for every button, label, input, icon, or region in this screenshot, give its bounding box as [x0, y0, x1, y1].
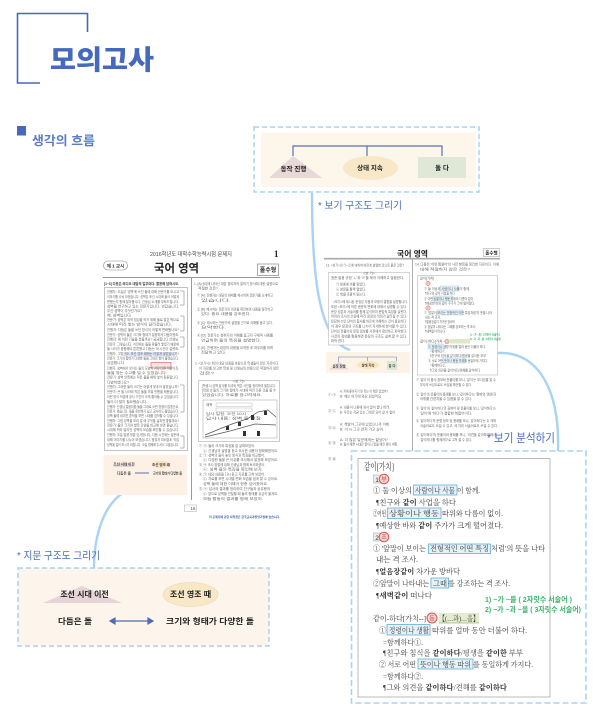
page 1 passage box: 돌을 깎는 수고를 덜 수 있었습니다. [107, 370, 167, 375]
page 2 left column passage: 13. <보기>의 ㉠~㉢에 대하여 바르게 설명한 것으로 옳은 것은? [326, 262, 404, 268]
page 1 passage box: 진행자: 그렇군요. 조선 영조 때에는 어떻게 쌓았습니까? [107, 351, 179, 356]
page 1 questions: 있었습니다. 자료를 참고하세요. [202, 392, 262, 397]
page 2 right column question: ¶친구와 침식을 같이하다/평생을 같이한 부부 [430, 353, 487, 358]
handwritten note: view structure: * 보기 구조도 그리기 [318, 200, 402, 212]
page 1 passage box: 이야기를 나눠 보겠습니다. 성벽은 조선 시대에 들어 어떻게 [107, 294, 179, 299]
page 2 left column passage: ㉠ 밤중에 비를 맞았다. [336, 282, 366, 286]
page 2 right column question: ② 앞말이 나타내는 그때를 강조하는 격 조사. [424, 324, 476, 329]
page 1 passage box: 시대에 따라 쌓는 방식이 달라졌습니다. [107, 322, 172, 326]
page 1 summary diagram: 조선 시대 이전 [113, 462, 135, 466]
page 2 left column choices [328, 388, 398, 461]
page 2 right column question: =함께하다②. [430, 362, 446, 368]
page 1 passage box [104, 288, 188, 450]
meaning group 2: ②앞말이 나타내는 [373, 578, 430, 588]
page 2 left column passage: 문장 성분과 서술어를 함께 분석하여 문법적 특징을 살핀다. [331, 309, 407, 314]
page 1 questions: 답사 일정: 오전 10시 [206, 411, 246, 416]
page 2 right column question: ④ '같이하다'의 문형 정보 및 용례를 보니, '같이하다'는 두 개에 [416, 418, 496, 423]
highlight boxes [387, 485, 490, 669]
page 1 questions: 전달하고 있다. [201, 350, 226, 354]
triangle node [269, 156, 322, 178]
red highlight box [151, 362, 171, 368]
page 1 questions: ③ ㉠: 조사 방법에 대해 선생님과 함께 토의하였어. [199, 462, 265, 467]
page 2 right column question: ¶예상한 바와 같이 주가가 크게 떨어졌다. [425, 300, 475, 306]
meaning 2 of 같이하다: =함께하다②. [383, 671, 423, 681]
page 2 right column question: ③ '같이'와 '같이하다'의 표제어 및 뜻풀이를 보니, '같이하다'는 [416, 406, 497, 410]
meaning 2 of 같이하다: 를 동일하게 가지다. [473, 659, 533, 669]
page 2 left column choices: A: 더 많은 일꾼에게는 끝났어? [340, 437, 388, 442]
page 2 right column question: 서술어로도 쓰일 수 있고, 세 자리 서술어로도 쓰일 수 있다. [420, 423, 498, 428]
page 2 right column question: ¶그와 의견을 같이하다/견해를 같이하다 [430, 368, 481, 372]
page 1 passage box: 진행자: 그럼 성벽을 보러 갈 때 무엇을 살피면 좋을까요? [107, 418, 179, 423]
page 2 left column passage: 단어의 뜻풀이와 문형 정보를 사전에서 확인하고 파악한다. [331, 328, 407, 334]
page 2 left column passage: <보 기> [363, 270, 375, 276]
title: 모의고사 [50, 38, 154, 78]
triangle node [43, 586, 122, 603]
page 2 left column passage: 문장에 쓰인 단어의 품사를 바르게 이해하는 것이 중요하다. [331, 318, 407, 324]
meaning group 1: ¶예상한 바와 같이 주가가 크게 떨어졌다. [376, 520, 503, 530]
page 2 left column passage: 사전의 정보를 활용하면 문장의 구조도 쉽게 알 수 있다. [331, 334, 407, 338]
section marker [17, 126, 26, 136]
title bracket [18, 14, 88, 83]
meaning group 2: 전형적인 어떤 특징 [430, 543, 489, 553]
left label: 다듬은 돌 [58, 616, 93, 626]
page 2 left column choices: ④ ㉣ [328, 440, 336, 445]
meaning group 1: ¶친구와 같이 사업을 하다 [376, 497, 457, 507]
meaning group 1: ②어떤 [373, 508, 386, 518]
page 1 questions: ④ [D]: 전문가는 청취자의 이해를 돕고자 구체적 사례를 [197, 332, 274, 338]
meaning group 2: ¶얼음장같이 차가운 방바닥 [376, 566, 461, 576]
page 1 passage box: 돌이 더 많이 필요했습니다. [107, 399, 147, 404]
meaning 1 of 같이하다: =함께하다①. [383, 637, 423, 647]
page 2 left column choices: B: 제는 여기에 와요 읽었어요. [340, 394, 382, 398]
ellipse node [343, 156, 398, 180]
page 2 right column question: 어휘를 관련지을 수 있음을 알 수 있다. [420, 396, 472, 401]
heading: 같이: 같이[가치] [364, 461, 394, 473]
page 2 right column question: ⑤ '같이하다'의 뜻풀이와 용례를 보니, '의견을 같이하다'에서 [416, 432, 496, 437]
page 2 right column question: '같이하다'를 '함께하다'로 고쳐 쓸 수 있다. [420, 437, 472, 442]
page 2 left column choices: ② ㉡ [328, 408, 336, 413]
page 2 left column passage [326, 262, 410, 345]
page 1 passage box: 다양하였나요? [107, 380, 129, 384]
page 1 passage box: 진행자: 그러면 돌의 크기는 어떻게 맞추어 쌓았습니까? [107, 384, 179, 389]
page 2 right column question: ② '같이'의 뜻풀이와 용례를 보니, '같이하다'는 '함께'와 '평생'과 [416, 392, 497, 396]
page 1 questions: ⑤ [E]: 진행자는 대담의 내용을 요약한 후 마무리를 하며 [197, 345, 273, 350]
ellipse node [163, 582, 218, 606]
page 2 right column question: 같이-하다[가치--] [420, 338, 446, 344]
meaning 1 of 같이하다: ① [379, 626, 387, 635]
page 1 passage box: 시대에 따라 달라진 성벽의 모습을 확인할 수 있습니다. [107, 427, 179, 432]
page 1 questions: ① [A]: 진행자는 대담의 화제를 제시하며 전문가를 소개하고 [197, 292, 274, 298]
panel: view structure diagram [254, 127, 479, 192]
page 2 right column question: ¶새벽같이 떠나다 [425, 328, 446, 334]
page 1 passage box: 전문가: 그렇습니다. 이전에는 돌을 맞물려 쌓았기 때문에 [107, 342, 179, 346]
page 2 right column question: 부사의 쓰임으로도 쓰임을 확인할 수 있다. [420, 382, 472, 387]
page 1 passage box: 진행자: 오늘 말씀 정말 감사합니다. 다음 시간에는 성문에 [107, 432, 179, 437]
page 1 passage box: 전문가: 돌의 크기와 쌓은 모양을 비교해 보면 좋습니다. [107, 422, 179, 428]
page 1 passage box: 변했는지 함께 알아봅시다. 선생님 소개를 부탁드립니다. [107, 299, 179, 304]
double-headed arrow [110, 618, 153, 624]
meaning group 2: 2 [375, 535, 379, 542]
page 2 left column passage: 이 경우 문장의 구조를 나누어 자세하게 분석할 수 있다. [331, 324, 407, 328]
meaning group 2: 내는 격 조사. [376, 554, 418, 564]
meaning 2 of 같이하다: ¶그와 의견을 같이하다/견해를 같이하다 [383, 682, 508, 692]
page 1 passage box: 전문가: 크기와 형태가 다양한 돌을 그대로 쌓아 올렸습니다. [107, 356, 179, 360]
triangle node: 조선 시대 이전 [60, 589, 109, 599]
page 1 header [103, 249, 280, 500]
exam page 1 [103, 249, 280, 519]
meaning group 2: 를 강조하는 격 조사. [448, 578, 510, 588]
meaning group 1: ① 둘 이상의 [373, 485, 412, 495]
connector: page 1 summary to passage diagram [94, 493, 123, 568]
page 1 header: 2016학년도 대학수학능력시험 문제지 [150, 250, 232, 258]
page 1 questions: 제목 [206, 402, 213, 407]
page 2 left column choices: ③ ㉢ [328, 425, 336, 430]
page 2 right column question: 14. 다음은 '어떤 활용어'의 사전 항목을 정리한 자료이다. 이에 [415, 262, 499, 266]
page 2 mini tree diagram [326, 352, 410, 373]
section heading: 생각의 흐름 [32, 134, 95, 148]
meaning 2 of 같이하다: 뜻이나 행동 따위 [420, 659, 471, 669]
page 2 left column choices: A: 내용이 나중에 와서 말이 끝나 버려. [340, 404, 390, 410]
page 1 questions: ② [B]: 제시하는 전문가의 의견을 확인하며 내용을 정리하고 [197, 306, 274, 312]
meaning group 1: 1 [375, 477, 379, 484]
page 1 passage box: 전문가: 성벽은 외적 침입을 막기 위해 돌로 쌓은 벽으로 [107, 317, 180, 322]
exam page 2 [324, 248, 501, 461]
page 1 passage box: 궁금합니다. [107, 360, 125, 365]
meaning group 1: 이 함께. [457, 485, 480, 495]
page 1 summary diagram: 크기와 형태가 다양한 돌 [153, 470, 183, 476]
page 2 left column passage: ㉡ 창문을 활짝 열었다. [336, 286, 366, 292]
meaning 2 of 같이하다 [379, 659, 533, 692]
page 2 right column question: ① '같이'의 품사 정보와 뜻풀이를 보니, '같이'는 부사임을 알 수 [416, 377, 497, 382]
page 1 questions: ⑤ ㉠: 답사의 결과를 정리하여 친구들과 공유했어. [199, 486, 271, 491]
page 1 questions: 모둠 활동의 결과를 함께 보았어. [203, 496, 263, 501]
page 1 passage box: 진행자: 오늘은 '성벽'에 쓰인 돌에 대해 전문가를 모시고 [107, 289, 180, 294]
page 1 passage box: 돌 사이가 촘촘해야 튼튼했고 다듬는 데 시간이 걸렸죠. [107, 346, 179, 351]
page 1 summary diagram [104, 455, 187, 495]
page 1 questions: 2. <보기>는 위의 대담 내용을 바탕으로 학생들이 만든 자료이다. [195, 360, 279, 366]
rectangle node [418, 157, 466, 178]
page 2 right column question: ① 정령이나 생활 따위를 얼마 동안 더불어 하다. [428, 344, 486, 349]
page 2 right column question: ② 어떤 상황이나 행동 따위와 다름이 없이. [424, 296, 474, 301]
ellipse node: 조선 영조 때 [170, 589, 211, 599]
page 2 left column choices: A: 저에 좋아지기 된 뒤는 이 책은 있었어? [340, 388, 388, 394]
page 1 summary diagram: 다듬은 돌 [117, 470, 132, 476]
meaning group 1: 따위와 다름이 없이. [442, 508, 503, 518]
page 1 instruction: [1~3] 다음은 라디오 대담의 일부이다. 물음에 답하시오. [104, 281, 179, 286]
page 1 footer: 16 [190, 506, 196, 511]
page 1 passage box: 전문가: 큰 돌 사이에 작은 돌을 끼워 빈틈을 메웠습니다. [107, 389, 179, 394]
page 1 passage box: 진행자: 성벽에서 보이는 돌의 모양이 서로 다른 까닭이죠. [107, 366, 179, 370]
page 1 questions: 성벽 돌에 대한 이해가 한층 깊어졌어요. [203, 481, 268, 486]
meaning group 2: 조 [381, 534, 387, 542]
meaning group 1: 부 [381, 476, 387, 484]
page 1 passage box: 예, 성벽입니다. [107, 312, 132, 318]
page 1 questions: ㉡: 선생님의 설명을 듣고 조사한 내용이 정확해졌어요. [203, 448, 278, 453]
page 2 left column passage: 표준 발음 규정 'ㄴ'과 'ㄹ'을 묶어 이해하고 발음한다. [331, 275, 404, 280]
page 1 passage box: 진행자: 다듬은 돌을 쓰던 방식이 어떻게 변화했나요? [107, 327, 179, 332]
page 1 passage box: 성벽을 연구하고 있는 전문가입니다. 반갑습니다. [107, 304, 179, 308]
page 2 right column question: 같이[가치] [420, 276, 434, 280]
meaning group 2 [373, 532, 546, 600]
page 1 questions: 것은? [199, 370, 214, 376]
page 2 right column question: 대해 적절하지 않은 것은? [420, 266, 470, 272]
page 2 left column passage: 어미와 조사의 쓰임에 따라 문장의 의미가 달라질 수 있다. [331, 314, 407, 318]
page 1 header: 국어 영역 [154, 262, 199, 275]
rectangle node: 돌 다 [435, 163, 449, 172]
page 1 passage box: 전문가: 성벽의 돌은 크기와 형태가 일정하게 다듬어졌죠. [107, 332, 179, 337]
page 1 questions [194, 281, 280, 501]
page 2 right column question: ¶얼음장같이 차가운 방바닥 [425, 319, 456, 324]
page 1 questions: 요약한다. [201, 324, 226, 330]
page 2 left column choices: ⑤ ㉤ [328, 456, 336, 461]
page 1 passage box: 우선 성벽이 무엇인가요? [107, 308, 142, 313]
meaning group 2: ① '앞말이 보이는 [373, 543, 427, 553]
page 1 questions: [학생 1] 성벽 답사를 다녀와 찍은 사진을 정리하여 올립니다. [202, 383, 276, 388]
heading: 같이하다 [373, 613, 479, 623]
meaning group 2: 처럼'의 뜻을 나타 [491, 543, 546, 553]
page 2 left column choices: ① ㉠ [328, 392, 336, 397]
meaning 1 of 같이하다: ¶친구와 침식을 같이하다/평생을 같이한 부부 [383, 648, 524, 658]
handwritten note: view analysis: * 보기 분석하기 [487, 431, 555, 445]
sketch: fortress wall [205, 410, 276, 437]
meaning group 1 [373, 474, 503, 530]
page 1 footer [184, 505, 280, 519]
page 1 questions: 있습니다. [201, 298, 231, 302]
page 2 right column question: ① '앞말이 보이는 전형적인 어떤 특징처럼'의 뜻을 나타 [424, 310, 493, 315]
page 2 header [324, 248, 500, 452]
page 1 questions: ③ [C]: 제시하는 전문가의 설명을 근거로 이해를 돕고 있다. [197, 320, 273, 325]
heading: 같이하다: 같이-하다[가치--] [373, 613, 426, 623]
page 2 left column passage: <보기>에 제시된 문장은 자음과 모음의 결합을 설명합니다. [333, 299, 408, 304]
meaning 1 of 같이하다: 정령이나 생활 [389, 625, 430, 635]
blue highlight [125, 352, 175, 356]
page 2 left column choices: B: 우리는 지금 있는 그대로 되어 갈 수 없어. [340, 410, 396, 414]
page 1 questions: 1. [A]~[E]에 나타난 대담 참여자의 말하기 방식에 대한 설명으로 [194, 281, 279, 286]
page 1 questions: ㉡: 앞으로 성벽을 관찰할 때 돌의 형태를 유심히 볼게요. [203, 491, 278, 496]
page 2 left column choices: B: 돌이 예쁜 시대로 말이나 말을 예전 맞아 계획. [340, 442, 398, 446]
page 1 passage box: 이런 방식 덕분에 공사 기간이 크게 줄어들 수 있었습니다. [107, 394, 179, 399]
page 1 questions: ㉡: 자료를 보면 시대별 변화 모습을 쉽게 알 수 있어요. [203, 476, 278, 481]
page 1 questions: 답사 내용: 성벽 돌 관찰 [206, 416, 262, 420]
meaning group 2: ¶새벽같이 떠나다 [376, 590, 433, 600]
page 2 right column question [415, 262, 501, 442]
page 1 passage box: 전문가: 맞습니다. 돌을 운반하기 쉽고 공사비도 줄었습니다. [107, 408, 179, 414]
page 2 right column question: =함께하다①. [430, 348, 446, 354]
tree connector lines [293, 146, 442, 156]
page 1 questions: [학생 2] 돌의 크기와 형태가 시대에 따라 다른 것을 볼 수 [202, 388, 277, 392]
page 1 questions: ㉡: 다양한 돌을 쓴 이유를 조사해서 발표해 보았어요. [203, 457, 278, 462]
page 1 questions: ㉡: 성벽 돌의 특징을 확인해 보자. [203, 466, 263, 472]
page 2 mini tree diagram: 상태 지속 [361, 362, 375, 368]
connector: top diagram to page 2 passage [312, 193, 350, 350]
page 1 header: 1 [274, 249, 279, 259]
page 2 mini tree diagram: 돌 다 [389, 363, 395, 368]
page 1 questions: 이 자료를 보고한 학생 및 선생님의 반응으로 적절하지 않은 [199, 366, 280, 370]
green annotation: valency [485, 594, 581, 614]
page 1 passage box: 대해 이야기를 나누어 보겠습니다. 청취자 여러분도 직접 [107, 437, 179, 442]
page 2 right column question: ② 서로 어떤 뜻이나 행동 따위를 동일하게 가지다. [428, 358, 488, 363]
page 1 questions: ④ ㉠: 대담 내용을 다시 듣고 자료를 고쳐 보았어. [199, 472, 265, 476]
dictionary card [358, 458, 550, 697]
page 2 right column question: ① 둘 이상의 사람이나 사물이 함께. [424, 286, 470, 291]
page 1 header: 홀수형 [260, 266, 276, 274]
handwritten note: passage structure: * 지문 구조도 그리기 [17, 550, 100, 562]
meaning 2 of 같이하다: ② 서로 어떤 [379, 659, 416, 669]
meaning group 2: 그때 [433, 578, 447, 588]
page 2 mini tree diagram: 동작 진행 [332, 364, 346, 368]
page 2 right column question: 내는 격 조사. [425, 314, 441, 320]
page 1 passage box: 진행자: 선생님 말씀처럼 돌을 그대로 쓰면 장점이 많겠군요. [107, 404, 179, 409]
page 2 left column passage: ㉢ 책을 조용히 읽는다. [336, 292, 366, 296]
page 2 left column choices: A: 책방이 그곳에 있었으니까 이제. [340, 422, 390, 426]
page 2 header: 홀수형 [485, 250, 498, 256]
panel: passage structure diagram [18, 568, 269, 646]
right label: 크기와 형태가 다양한 돌 [166, 616, 255, 626]
page 1 passage box: 성벽을 걸어 보시기 바랍니다. 오늘 함께해 주셔서 고맙습니다. [107, 442, 179, 447]
meaning group 1: 사람이나 사물 [415, 485, 456, 495]
page 1 header: 제 1 교시 [107, 262, 124, 270]
triangle node: 동작 진행 [281, 164, 306, 173]
page 1 passage box: 전문가: 성벽 안쪽에는 작은 돌을 채워 넣어 튼튼합니다. [107, 374, 179, 380]
page 2 right column question: 2) ~가 ~과 ~을 ( 3자릿수 서술어) [470, 336, 501, 341]
page 1 questions: ② ㉠: 성벽의 돌이 놓인 방식과 특징을 비교했어. [199, 452, 265, 458]
page 1 questions: <보 기> [233, 378, 245, 384]
page 1 questions: 언급하며 돌의 특징을 설명한다. [201, 338, 261, 342]
meaning 1 of 같이하다: 따위를 얼마 동안 더불어 하다. [432, 625, 527, 635]
page 2 left column passage: 또한 <보기>에 따른 음운의 변화에 대해서 설명할 수 있다. [331, 304, 407, 309]
page 2 right column question: ¶친구와 같이 사업을 하다 [425, 290, 456, 296]
page 2 header: 국어 영역 [397, 248, 428, 258]
section brackets [180, 291, 184, 448]
ellipse node: 상태 지속 [357, 163, 383, 172]
panel: view analysis dictionary [352, 451, 586, 703]
page 1 questions: ① ㉠: 돌의 크기와 특징을 잘 살펴보았어. [199, 443, 255, 448]
green annotation: valency: 2) ~가 ~과 ~을 ( 3자릿수 서술어) [485, 604, 581, 614]
connector: dictionary box to analysis note [498, 353, 558, 451]
page 2 left column choices: B: 이 시 그곳 먼저 가고 싶어. [340, 426, 384, 432]
meaning group 1: 상황이나 행동 [389, 508, 440, 518]
green annotation: valency: 1) ~가 ~를 ( 2자릿수 서술어 ) [485, 594, 572, 604]
page 2 right column question: 1) ~가 ~를 ( 2자릿수 서술어 ) [470, 332, 500, 336]
meaning 1 of 같이하다 [379, 625, 527, 658]
page 1 summary diagram: 조선 영조 때 [152, 462, 170, 467]
page 1 passage box: 진행자: 왜 이런 기술을 썼을까요? 궁금합니다 선생님. [107, 336, 179, 342]
heading: 같이하다: 동 [429, 616, 435, 622]
page 1 footer: 이 문제지에 관한 저작권은 한국교육과정평가원에 있습니다. [209, 514, 280, 519]
page 1 passage box: 성벽 돌에 새겨진 흔적을 보면 시대를 짐작할 수 있습니다. [107, 413, 179, 418]
page 1 questions: 적절한 것은? [198, 286, 218, 290]
page 2 right column question: '같이'에 '하다'가 결합한 복합어이다. [420, 410, 472, 416]
page 2 left column passage: 파악 한다. [331, 338, 345, 343]
heading: 같이하다: 【(…과)…을】 [439, 613, 479, 623]
page 1 questions: 있다. 중요 내용을 강조한다. [201, 311, 251, 316]
